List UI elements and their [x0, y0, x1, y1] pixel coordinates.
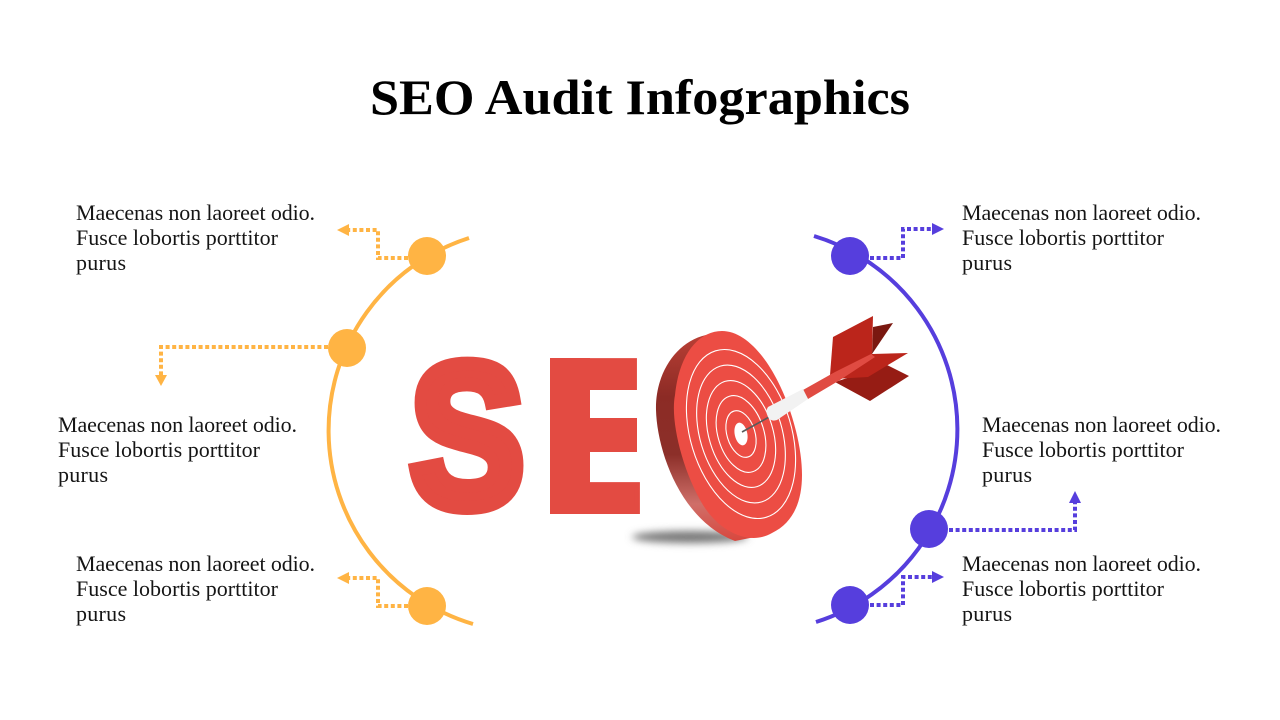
text block: top left: purus [76, 250, 126, 275]
text block: middle left: Maecenas non laoreet odio. [58, 412, 297, 437]
text block: middle right: purus [982, 462, 1032, 487]
text block: bottom right: Fusce lobortis porttitor [962, 576, 1165, 601]
SEO letter E: E [544, 317, 643, 557]
bullseye [732, 421, 750, 447]
text block: middle right: Maecenas non laoreet odio. [982, 412, 1221, 437]
node: bottom right [831, 586, 869, 624]
text block: bottom left: Fusce lobortis porttitor [76, 576, 279, 601]
text block: top right: Maecenas non laoreet odio. [962, 200, 1201, 225]
dart front fins [830, 316, 873, 375]
text block: bottom right: Maecenas non laoreet odio. [962, 551, 1201, 576]
shadow [632, 531, 748, 543]
text block: middle right: Fusce lobortis porttitor [982, 437, 1185, 462]
node: top left [408, 237, 446, 275]
arrow: middle right [949, 491, 1081, 530]
title: SEO Audit Infographics [370, 69, 910, 125]
text block: middle right [982, 412, 1221, 487]
text block: bottom left: purus [76, 601, 126, 626]
text block: top right [962, 200, 1201, 275]
text block: bottom left [76, 551, 315, 626]
dart barrel [766, 389, 808, 421]
right purple arc with nodes [814, 236, 957, 624]
text block: bottom right [962, 551, 1201, 626]
SEO letter S: S [410, 321, 524, 549]
left orange arc with nodes [328, 237, 473, 625]
arrow: bottom right [870, 571, 944, 605]
icon: target with dart [632, 316, 909, 543]
text block: bottom right: purus [962, 601, 1012, 626]
node: bottom left [408, 587, 446, 625]
arrow: top left [337, 224, 408, 258]
text block: top right: purus [962, 250, 1012, 275]
text block: top right: Fusce lobortis porttitor [962, 225, 1165, 250]
node: middle left [328, 329, 366, 367]
dart back fins [872, 323, 893, 354]
dart needle [742, 416, 771, 432]
rings [667, 336, 815, 532]
text block: top left [76, 200, 315, 275]
dart shaft [803, 354, 875, 399]
board side [656, 335, 765, 541]
arrow: middle left [155, 347, 328, 386]
text block: middle left: Fusce lobortis porttitor [58, 437, 261, 462]
text block: middle left [58, 412, 297, 487]
text block: top left: Fusce lobortis porttitor [76, 225, 279, 250]
board face [674, 331, 802, 538]
node: top right [831, 237, 869, 275]
text block: middle left: purus [58, 462, 108, 487]
arrow: bottom left [337, 572, 408, 606]
node: middle right [910, 510, 948, 548]
text block: bottom left: Maecenas non laoreet odio. [76, 551, 315, 576]
arrow: top right [870, 223, 944, 258]
text block: top left: Maecenas non laoreet odio. [76, 200, 315, 225]
